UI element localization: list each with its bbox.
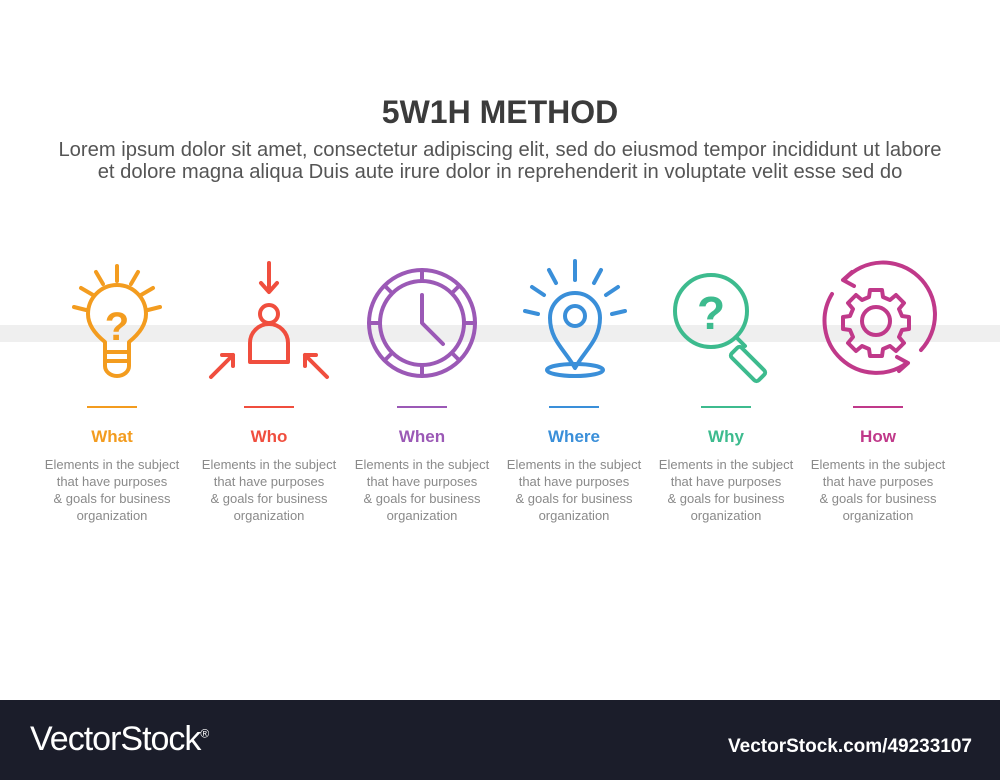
column: Why [659, 406, 794, 523]
column: Where: that have purposes [519, 474, 629, 489]
column: Why: Elements in the subject [659, 457, 793, 472]
column: Where: organization [539, 508, 609, 523]
column: When: & goals for business [363, 491, 481, 506]
column: Who: that have purposes [214, 474, 324, 489]
column: Who [202, 406, 336, 523]
background band [0, 325, 1000, 342]
icon: person with arrows [211, 263, 327, 377]
column: What [45, 406, 180, 523]
column: Where: Where [548, 427, 600, 446]
column: How: organization [843, 508, 913, 523]
subtitle: et dolore magna aliqua Duis aute irure dolor in reprehenderit in voluptate velit esse sed do [98, 161, 902, 183]
column: Why: that have purposes [671, 474, 781, 489]
column: Who: Who [251, 427, 287, 446]
column: Where: & goals for business [515, 491, 633, 506]
title: 5W1H METHOD [382, 94, 618, 130]
column: What: What [91, 427, 133, 446]
column: When: When [399, 427, 445, 446]
column: When: that have purposes [367, 474, 477, 489]
column: What: Elements in the subject [45, 457, 179, 472]
icon: clock [369, 270, 475, 376]
column: How: How [860, 427, 896, 446]
column: Who: organization [234, 508, 304, 523]
column: How [811, 406, 946, 523]
column: What: organization [77, 508, 147, 523]
footer logo: VectorStock® [30, 720, 208, 758]
column: Where: Elements in the subject [507, 457, 641, 472]
column: Why: organization [691, 508, 761, 523]
column: Why: & goals for business [667, 491, 785, 506]
icon: location pin [525, 261, 625, 376]
column: Who: & goals for business [210, 491, 328, 506]
footer bar [0, 700, 1000, 780]
subtitle [58, 139, 942, 183]
column: When: organization [387, 508, 457, 523]
column: Why: Why [708, 427, 744, 446]
column: How: that have purposes [823, 474, 933, 489]
icon: lightbulb [74, 266, 160, 376]
icon: magnifier: ? [697, 287, 725, 339]
footer id: VectorStock.com/49233107 [728, 736, 972, 757]
column: What: & goals for business [53, 491, 171, 506]
column: Where [507, 406, 642, 523]
icon: magnifier [675, 275, 766, 382]
subtitle: Lorem ipsum dolor sit amet, consectetur adipiscing elit, sed do eiusmod tempor incididunt ut labore [58, 139, 942, 161]
column: How: Elements in the subject [811, 457, 945, 472]
column: What: that have purposes [57, 474, 167, 489]
icon: lightbulb: ? [105, 305, 129, 349]
column: When [355, 406, 490, 523]
icon: gear with cycle arrows [825, 263, 935, 373]
icons [72, 259, 937, 384]
column: Who: Elements in the subject [202, 457, 336, 472]
column: How: & goals for business [819, 491, 937, 506]
column: When: Elements in the subject [355, 457, 489, 472]
